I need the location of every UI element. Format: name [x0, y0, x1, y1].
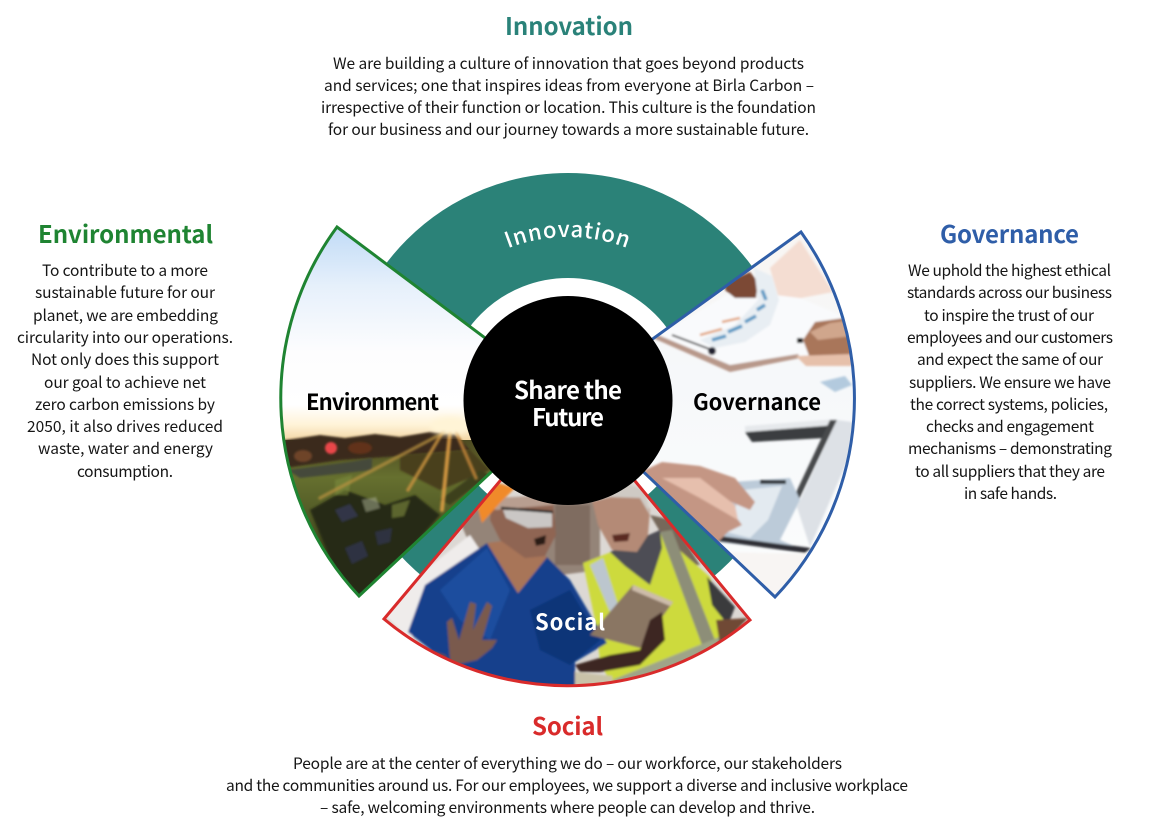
text block: Governance description: to all suppliers that they are: [915, 460, 1105, 482]
photo: raised hand: [447, 602, 497, 665]
label: Environment: Environment: [306, 385, 439, 417]
photo: sky: [282, 229, 478, 440]
panel: Governance segment: [642, 230, 856, 600]
text block: Innovation description: for our business and our journey towards a more sustainable future.: [328, 118, 809, 140]
label: Governance: Governance: [693, 385, 821, 417]
photo: tree line: [285, 430, 470, 468]
text block: Social description: and the communities around us. For our employees, we support a diverse and inclusive workplace: [226, 774, 908, 796]
center text: Share the Future: Future: [532, 398, 604, 433]
outline: Governance segment: [568, 232, 854, 597]
text block: Innovation description: irrespective of their function or location. This culture is the foundation: [321, 96, 816, 118]
ring label: Innovation: Innovation: [504, 222, 628, 248]
text block: Governance description: and expect the same of our: [917, 348, 1104, 370]
heading: Innovation: Innovation: [505, 7, 633, 42]
text block: Innovation description: [321, 52, 816, 140]
text block: Innovation description: and services; one that inspires ideas from everyone at Birla Carbon –: [324, 74, 814, 96]
photo: typing hands: [640, 462, 755, 545]
text block: Governance description: [907, 259, 1113, 504]
photo: arm, paper and spiral chart: [640, 240, 852, 597]
heading: Social: Social: [532, 707, 603, 742]
text block: Environmental description: waste, water and energy: [38, 437, 213, 459]
panel: Social segment: [382, 479, 752, 688]
heading: Environmental: Environmental: [38, 215, 213, 250]
text block: Governance description: the correct systems, policies,: [910, 393, 1108, 415]
photo: laptop: [745, 425, 832, 442]
text block: Governance description: to inspire the trust of our: [924, 304, 1095, 326]
text block: Environmental description: To contribute to a more: [42, 259, 208, 281]
text block: Social description: – safe, welcoming environments where people can develop and thrive.: [320, 796, 815, 818]
photo: man with safety vest: [583, 533, 727, 690]
center text: Share the Future: Share the: [514, 371, 622, 406]
text block: Environmental description: zero carbon emissions by: [35, 393, 215, 415]
text block: Environmental description: [17, 259, 233, 482]
photo: background: [386, 481, 748, 676]
text block: Governance description: checks and engagement: [926, 415, 1094, 437]
text block: Environmental description: Not only does this support: [31, 348, 219, 370]
photo: table reflection: [732, 552, 807, 594]
photo: sun rays: [320, 430, 476, 510]
photo: woman with hard hat and blue shirt: [408, 543, 607, 690]
text block: Innovation description: We are building a culture of innovation that goes beyond products: [333, 52, 804, 74]
text block: Governance description: standards across our business: [907, 281, 1112, 303]
center circle: [464, 296, 672, 505]
text block: Social description: People are at the center of everything we do – our workforce, our stakeholders: [293, 752, 842, 774]
text block: Environmental description: 2050, it also drives reduced: [27, 415, 223, 437]
text block: Environmental description: consumption.: [77, 460, 173, 482]
photo: leaves and sunset details: [288, 442, 490, 595]
teal ring: Innovation segment: [392, 226, 744, 576]
text block: Governance description: suppliers. We ensure we have: [909, 371, 1111, 393]
label: Social: Social: [535, 605, 605, 637]
heading: Governance: Governance: [940, 215, 1079, 250]
panel: Environment segment: [279, 224, 493, 598]
outline: Social segment: [384, 400, 750, 686]
outline: Environment segment: [281, 227, 568, 596]
text block: Governance description: in safe hands.: [964, 482, 1057, 504]
text block: Environmental description: circularity into our operations.: [17, 326, 233, 348]
text block: Governance description: mechanisms – demonstrating: [908, 437, 1112, 459]
center text: Share the Future: [514, 371, 622, 433]
photo: crop field: [285, 440, 490, 594]
text block: Governance description: employees and our customers: [907, 326, 1113, 348]
text block: Environmental description: sustainable future for our: [35, 281, 216, 303]
photo: tablet and holding arm: [590, 585, 673, 648]
text block: Governance description: We uphold the highest ethical: [908, 259, 1111, 281]
text block: Environmental description: our goal to achieve net: [44, 371, 206, 393]
photo: desk background: [654, 234, 852, 554]
text block: Social description: [226, 752, 908, 818]
text block: Environmental description: planet, we are embedding: [33, 304, 218, 326]
